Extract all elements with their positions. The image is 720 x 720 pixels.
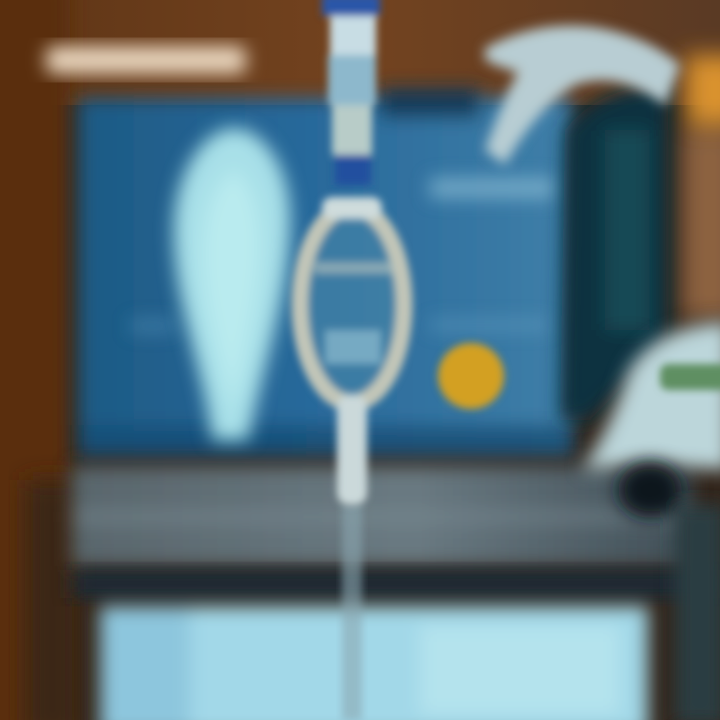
dark side panel	[560, 85, 668, 420]
white device right	[582, 322, 720, 470]
oval ring with stem	[300, 197, 404, 505]
green display	[660, 364, 720, 390]
white drop shape	[174, 128, 290, 440]
dark band	[72, 570, 712, 598]
black knob	[618, 462, 720, 720]
title smudge	[46, 46, 246, 74]
orange glow right	[680, 55, 720, 320]
gray shelf band	[72, 466, 692, 566]
yellow circle	[438, 343, 504, 409]
drip line below the stem	[342, 505, 362, 720]
white ribbon top right	[485, 26, 680, 165]
panel highlights	[130, 178, 555, 332]
blue panel	[78, 88, 573, 456]
light blue lower screen	[100, 606, 648, 720]
IV tube top	[322, 0, 380, 185]
